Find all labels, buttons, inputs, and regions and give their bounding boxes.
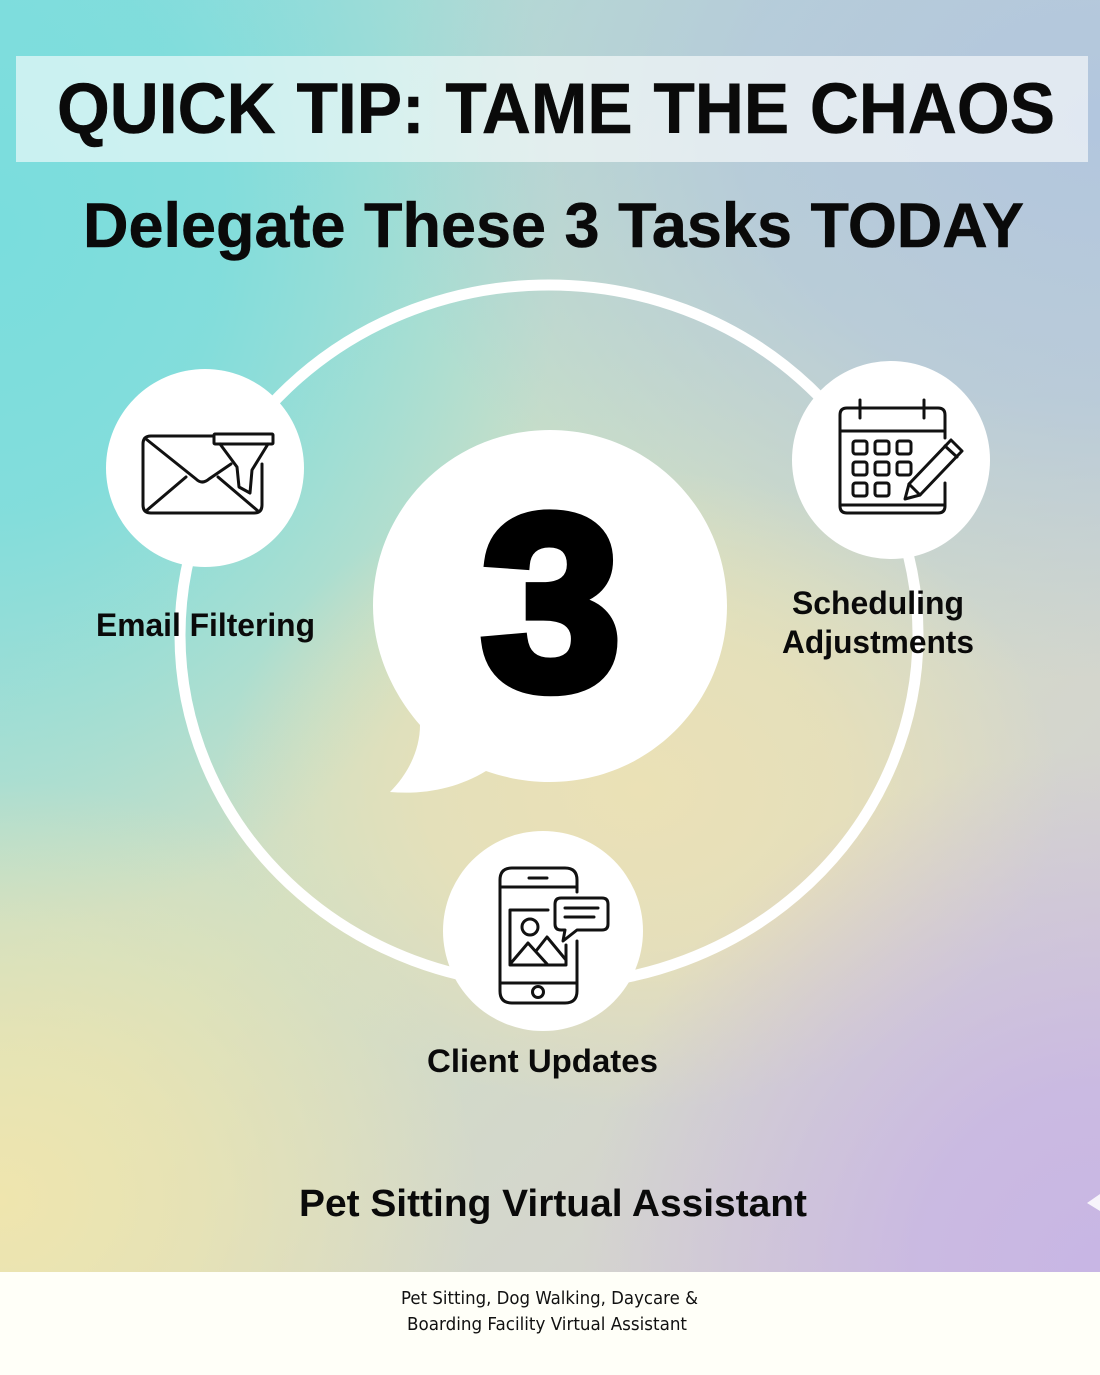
brand line: Pet Sitting Virtual Assistant — [299, 1183, 807, 1225]
central speech bubble with number: 3 — [481, 463, 621, 741]
task: client updates — [427, 831, 658, 1079]
title banner: QUICK TIP: TAME THE CHAOS — [57, 70, 1055, 149]
task: scheduling adjustments — [782, 361, 990, 660]
icon: calendar with pencil — [840, 400, 962, 513]
footer band — [0, 1272, 1100, 1375]
footer text: Boarding Facility Virtual Assistant — [407, 1314, 687, 1335]
subtitle: Delegate These 3 Tasks TODAY — [83, 191, 1024, 261]
label: client updates: Client Updates — [427, 1043, 658, 1079]
central speech bubble with number — [373, 430, 727, 793]
cycle ring — [180, 285, 918, 985]
label: scheduling adjustments: Scheduling — [792, 585, 964, 621]
label: scheduling adjustments — [782, 585, 974, 660]
icon: phone with message — [500, 868, 608, 1003]
edge arrow — [1087, 1194, 1100, 1211]
footer text: Pet Sitting, Dog Walking, Daycare & — [401, 1288, 698, 1309]
label: email filtering: Email Filtering — [96, 607, 315, 643]
footer text — [401, 1288, 698, 1335]
task: email filtering — [96, 369, 315, 643]
label: scheduling adjustments: Adjustments — [782, 624, 974, 660]
icon: envelope with funnel — [143, 434, 273, 513]
